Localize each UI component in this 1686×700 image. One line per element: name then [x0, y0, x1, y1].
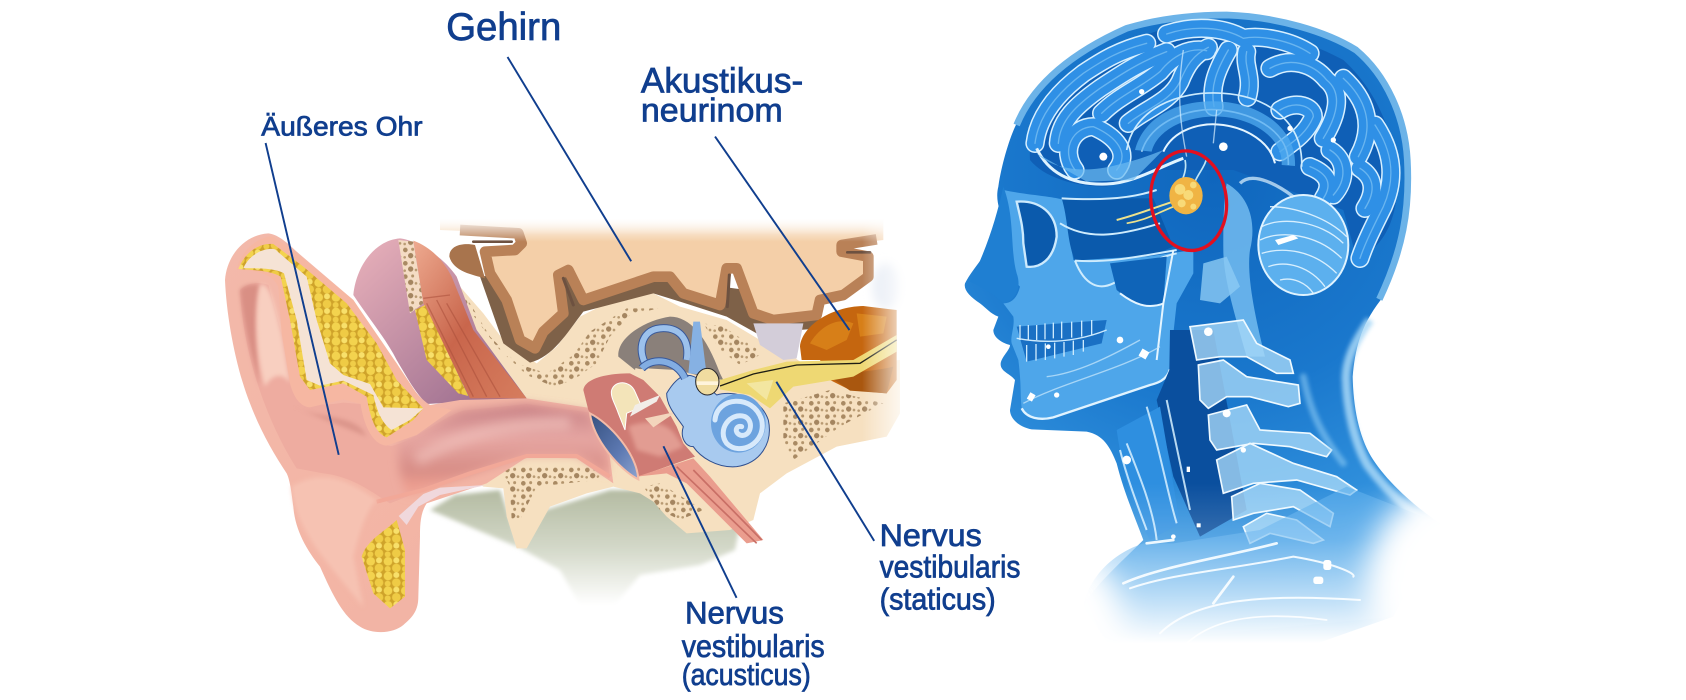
- cervical vertebrae: [1190, 320, 1357, 543]
- cochlea and vestibule: [667, 375, 769, 467]
- leader line: Gehirn: [508, 57, 631, 261]
- lilac tissue: [753, 323, 803, 360]
- brain with gyri: [1030, 26, 1397, 258]
- label: Akustikusneurinom: Akustikus-: [641, 60, 803, 100]
- label: Nervus vestibularis (acusticus): Nervus: [685, 596, 784, 631]
- vestibular nerve: [720, 335, 897, 408]
- illustration: ear cross-section: [225, 200, 922, 632]
- head silhouette: [965, 13, 1440, 663]
- leader line: Nervus vestibularis (staticus): [776, 382, 874, 541]
- tumour in the ear view: [800, 306, 897, 393]
- leader line: Äußeres Ohr: [266, 143, 339, 455]
- shoulders and ribs: [1083, 377, 1440, 650]
- vestibular ganglion: [696, 368, 719, 395]
- dark channel of the neck: [1157, 330, 1247, 537]
- grey-green tissue below the bone: [430, 490, 745, 610]
- leader line: Nervus vestibularis (acusticus): [663, 446, 737, 598]
- label: Nervus vestibularis (acusticus): (acusticus): [682, 659, 811, 692]
- ossicles: [611, 383, 642, 430]
- label: Nervus vestibularis (staticus): vestibularis: [880, 549, 1020, 584]
- inner ear: [583, 306, 897, 543]
- tumor marker with red circle: [1117, 146, 1233, 255]
- text and leader lines: [261, 6, 1020, 692]
- leader line: Akustikusneurinom: [715, 137, 849, 330]
- middle ear cavity: [583, 373, 695, 477]
- label: Akustikusneurinom: [641, 60, 803, 130]
- eardrum: [590, 413, 638, 479]
- head illustration: [965, 13, 1440, 663]
- dark band behind the cheek bone: [1062, 198, 1173, 261]
- head rim: [1017, 15, 1408, 299]
- skull: [970, 187, 1193, 419]
- label: Nervus vestibularis (staticus): Nervus: [880, 518, 982, 553]
- neck muscles: [1117, 406, 1173, 486]
- label: Nervus vestibularis (acusticus): vestibularis: [682, 629, 825, 664]
- label: Nervus vestibularis (staticus): [880, 518, 1020, 617]
- tissue behind the canal: mauve, muscle and fat: [353, 238, 527, 404]
- teeth: [1017, 320, 1107, 362]
- eustachian tube: [637, 458, 763, 543]
- brain: [430, 200, 897, 363]
- label: Akustikusneurinom: neurinom: [641, 93, 783, 130]
- sparkles: [1027, 89, 1336, 584]
- eye socket: [1017, 202, 1057, 267]
- outer ear: [225, 233, 613, 632]
- label: Gehirn: Gehirn: [446, 6, 561, 49]
- cerebellum and brainstem: [1200, 178, 1348, 357]
- label: Nervus vestibularis (acusticus): [682, 596, 825, 692]
- label: Nervus vestibularis (staticus): (staticus): [880, 584, 996, 617]
- semicircular canals: [642, 328, 687, 368]
- label: Äußeres Ohr: Äußeres Ohr: [261, 111, 423, 141]
- inner ear cavity: [618, 317, 723, 380]
- fade on right edge: [862, 200, 922, 440]
- temporal bone with pores: [447, 263, 900, 548]
